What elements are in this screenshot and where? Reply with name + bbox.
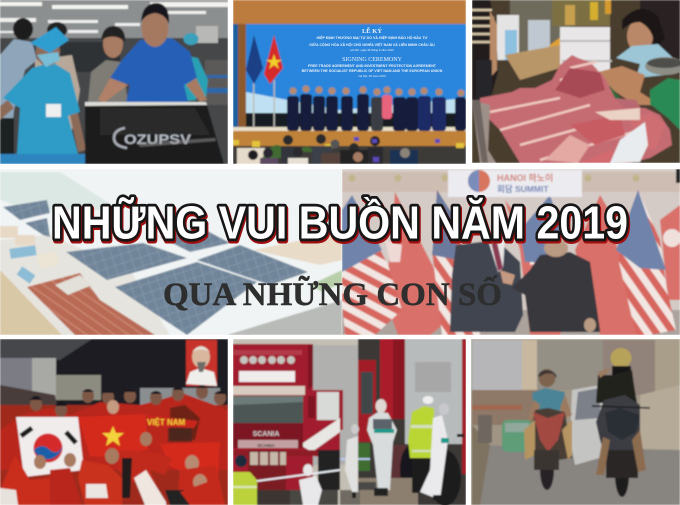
team members bbox=[0, 385, 228, 470]
photo: motorbikes in smog bbox=[471, 339, 680, 505]
truck cab bbox=[233, 344, 340, 505]
photo: factory workers bbox=[0, 0, 228, 164]
back man behind worker bbox=[34, 21, 81, 131]
US flag left bbox=[342, 250, 402, 335]
monitor bbox=[85, 102, 224, 164]
white van bbox=[570, 385, 610, 465]
subtitle: QUA NHỮNG CON SỐ bbox=[163, 274, 502, 313]
teal worker at right bbox=[182, 32, 209, 102]
US flag behind leaders bbox=[432, 243, 481, 335]
center flags bbox=[504, 200, 562, 335]
Korean flag bbox=[16, 417, 84, 477]
rider two bbox=[592, 348, 650, 497]
summit logo bbox=[448, 170, 582, 197]
banner text: BETWEEN THE SOCIALIST REPUBLIC OF VIET NAM AND THE EUROPEAN UNION bbox=[302, 69, 443, 73]
title: NHỮNG VUI BUỒN NĂM 2019 bbox=[53, 198, 629, 250]
grey shirt man bbox=[88, 26, 128, 102]
photo: pork market stall bbox=[472, 0, 680, 163]
dignitaries bbox=[287, 94, 466, 131]
forensic officer far left bbox=[345, 424, 359, 498]
truck cab: SCANIA bbox=[253, 431, 279, 438]
photo: aerial industrial park bbox=[0, 169, 342, 335]
flags bbox=[246, 35, 283, 128]
blue work surface bbox=[0, 154, 85, 164]
Vietnam flag bbox=[78, 414, 148, 457]
vendor in striped shirt bbox=[472, 0, 498, 102]
vendor woman bbox=[598, 9, 673, 105]
monitor: OZUPSV bbox=[124, 131, 192, 147]
rider one bbox=[524, 369, 572, 490]
NK flag left bbox=[388, 192, 442, 335]
banner text: GIỮA CỘNG HÒA XÃ HỘI CHỦ NGHĨA VIỆT NAM VÀ LIÊN MINH CHÂU ÂU bbox=[309, 42, 435, 47]
dark cab side bbox=[358, 339, 466, 505]
portrait bbox=[186, 340, 217, 386]
summit logo: 회담 SUMMIT bbox=[497, 184, 549, 194]
banner text: Hà Nội, 30 June 2019 bbox=[358, 74, 386, 78]
summit logo: HANOI 하노이 bbox=[497, 172, 553, 183]
police tape bbox=[257, 469, 340, 482]
banner text: SIGNING CEREMONY bbox=[342, 57, 403, 63]
leader suits bbox=[450, 238, 523, 332]
truck cab: SCANIA bbox=[257, 443, 275, 448]
US flag right bbox=[618, 190, 676, 335]
green car bbox=[502, 420, 532, 452]
screen bbox=[246, 24, 466, 114]
left worker in teal bbox=[0, 27, 86, 154]
scale bbox=[645, 57, 680, 130]
police officer left bbox=[233, 455, 257, 505]
forensic officer with box bbox=[367, 399, 397, 496]
banner text bbox=[302, 27, 443, 78]
banner text: HIỆP ĐỊNH THƯƠNG MẠI TỰ DO VÀ HIỆP ĐỊNH BẢO HỘ ĐẦU TƯ bbox=[317, 35, 427, 40]
photo: Vietnam football team bbox=[0, 339, 228, 505]
photo: Essex truck scene bbox=[233, 339, 466, 505]
photo: Hanoi summit flags bbox=[342, 169, 680, 335]
forensic officer left bbox=[299, 464, 322, 505]
right NK bbox=[660, 205, 680, 300]
trailer bbox=[313, 345, 358, 465]
audience bbox=[233, 134, 464, 164]
police officer in hi-vis bbox=[408, 396, 435, 493]
banner text: LỄ KÝ bbox=[362, 27, 382, 35]
front row players bbox=[0, 432, 225, 505]
banner text: FREE TRADE AGREEMENT AND INVESTMENT PROTECTION AGREEMENT bbox=[308, 64, 437, 68]
blue shirt man bbox=[98, 3, 207, 102]
VIET NAM banner: VIỆT NAM bbox=[147, 418, 186, 427]
VIET NAM banner bbox=[146, 415, 198, 428]
forensic officer right bbox=[420, 403, 449, 500]
photo: signing ceremony bbox=[233, 0, 466, 164]
left background man bbox=[0, 18, 37, 154]
banner text: Hà Nội, ngày 30 tháng 6 năm 2019 bbox=[350, 48, 394, 52]
title: NHỮNG VUI BUỒN NĂM 2019 bbox=[52, 196, 628, 248]
pork bbox=[480, 55, 672, 163]
